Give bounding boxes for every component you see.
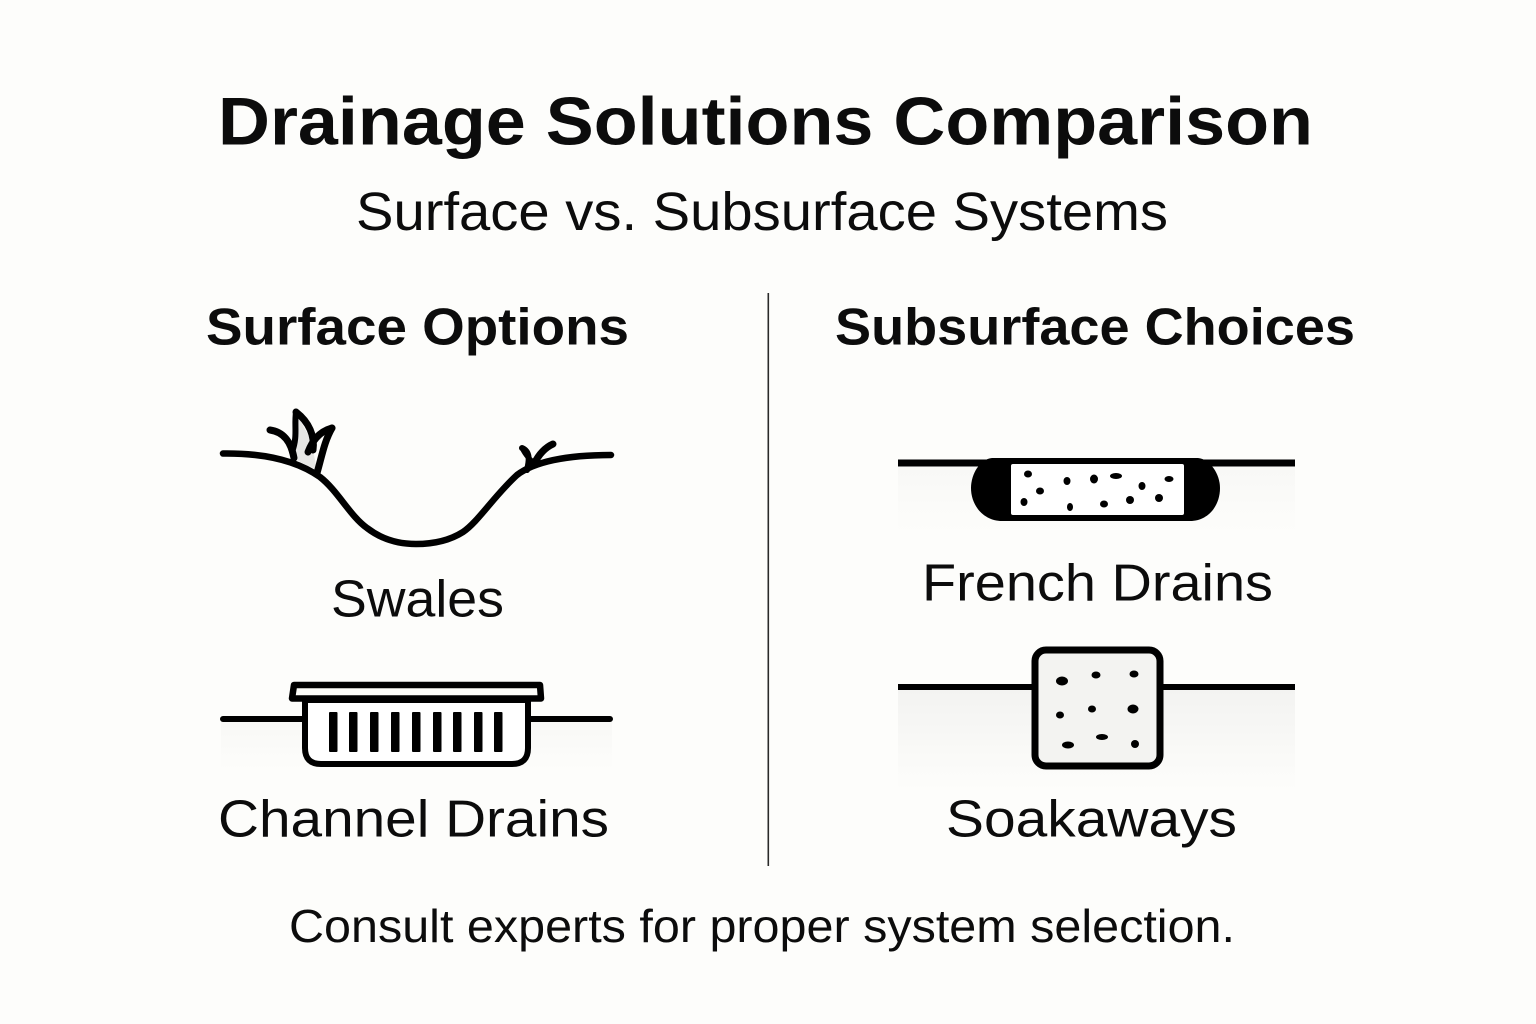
icon: soakaway xyxy=(898,650,1295,790)
label: french drains: French Drains xyxy=(922,554,1273,612)
panel: surface options xyxy=(206,298,629,848)
heading: surface options: Surface Options xyxy=(206,298,629,356)
panel: subsurface choices xyxy=(835,298,1355,848)
icon: french drain xyxy=(898,458,1295,533)
subtitle: Surface vs. Subsurface Systems xyxy=(356,182,1168,242)
divider between columns xyxy=(768,293,769,866)
label: swales: Swales xyxy=(331,570,504,628)
icon: channel drain xyxy=(221,685,612,770)
label: channel drains: Channel Drains xyxy=(218,790,609,848)
heading: subsurface choices: Subsurface Choices xyxy=(835,298,1355,356)
label: soakaways: Soakaways xyxy=(946,790,1237,848)
icon: swale xyxy=(223,412,611,544)
title: Drainage Solutions Comparison xyxy=(218,84,1313,160)
footer note: Consult experts for proper system selection. xyxy=(289,900,1235,952)
